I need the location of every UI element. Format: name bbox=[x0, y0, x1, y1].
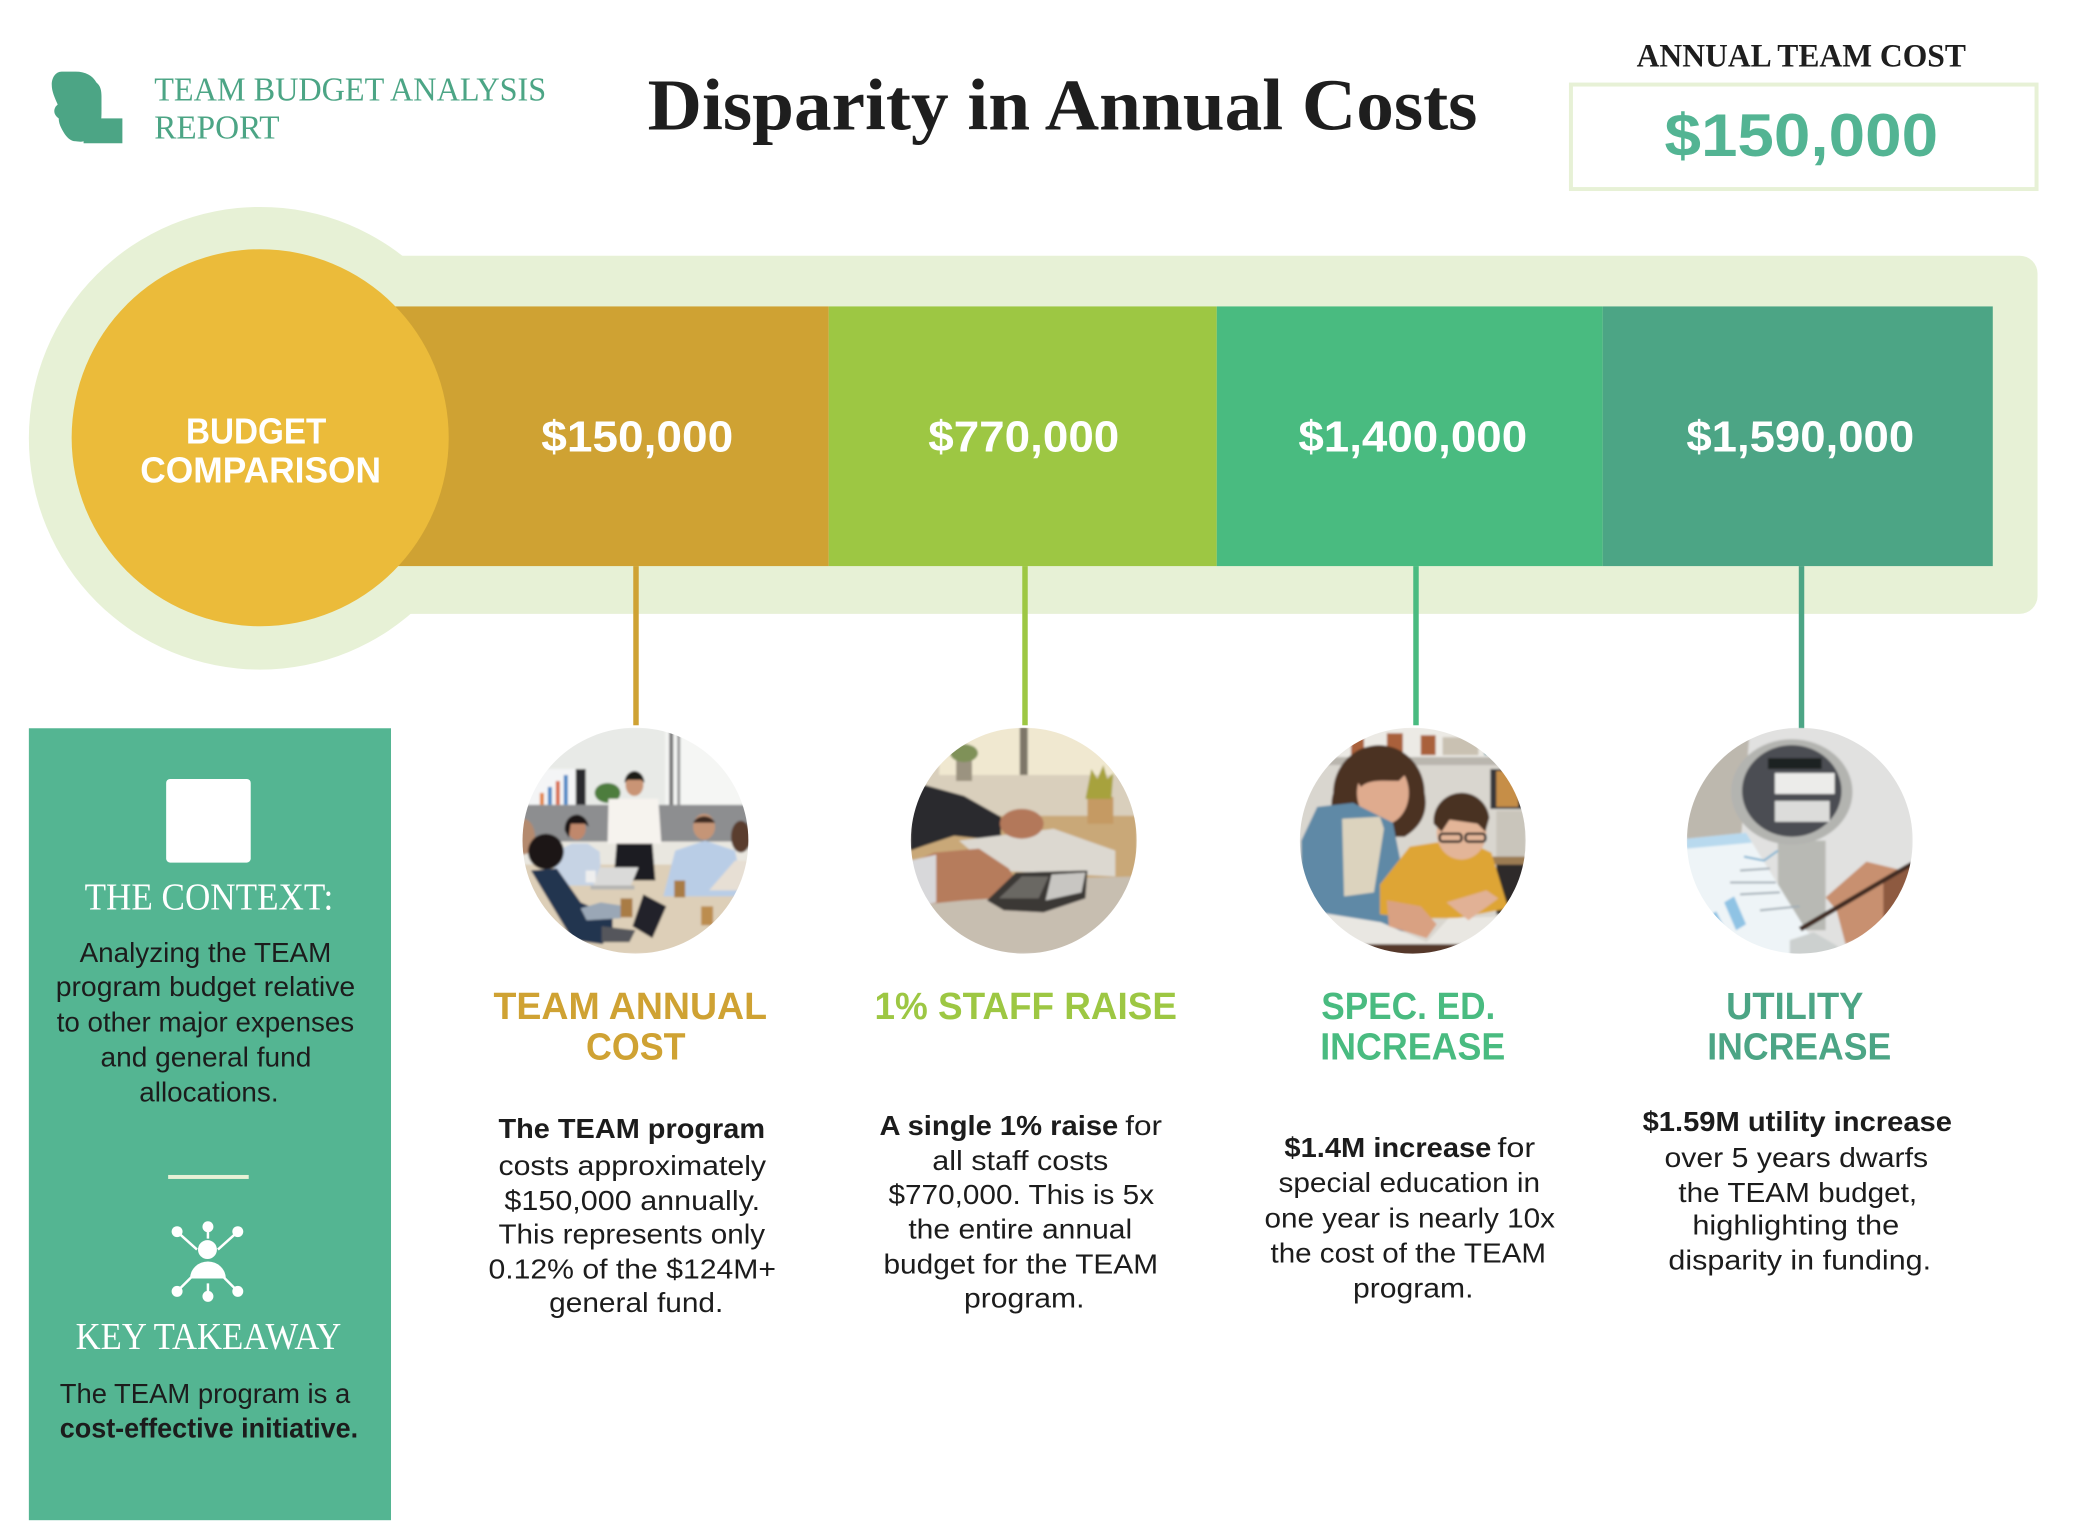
header label: REPORT bbox=[154, 109, 280, 146]
card text bbox=[1643, 1106, 1952, 1275]
card text bbox=[1265, 1132, 1555, 1303]
card text: The TEAM program bbox=[498, 1113, 765, 1144]
photo: parent and child bbox=[1299, 727, 1526, 960]
context text: allocations. bbox=[139, 1076, 279, 1107]
takeaway heading: KEY TAKEAWAY bbox=[76, 1316, 341, 1358]
card heading bbox=[1320, 986, 1505, 1069]
card heading: 1% STAFF RAISE bbox=[875, 986, 1177, 1028]
card text: disparity in funding. bbox=[1668, 1244, 1931, 1275]
card: team annual cost bbox=[489, 986, 776, 1318]
card heading: UTILITY bbox=[1726, 986, 1863, 1028]
budget comparison circle: COMPARISON bbox=[140, 451, 381, 491]
card: utility bbox=[1643, 986, 1952, 1275]
photo: calculator bbox=[910, 727, 1137, 954]
card text: budget for the TEAM bbox=[883, 1248, 1158, 1279]
cost segment: utility bbox=[1603, 306, 1993, 566]
card text: for bbox=[1125, 1110, 1162, 1141]
card text: for bbox=[1497, 1132, 1535, 1163]
context text: and general fund bbox=[100, 1042, 311, 1073]
takeaway text: The TEAM program is a bbox=[60, 1378, 351, 1409]
card text: the TEAM budget, bbox=[1678, 1177, 1917, 1208]
icon: blank square bbox=[166, 779, 251, 863]
cost segment: staff raise: $770,000 bbox=[928, 413, 1119, 462]
context text bbox=[56, 937, 355, 1107]
card text: general fund. bbox=[549, 1287, 723, 1318]
logo icon bbox=[52, 72, 122, 143]
context text: to other major expenses bbox=[57, 1007, 354, 1038]
annual team cost callout bbox=[1571, 39, 2037, 189]
card text: all staff costs bbox=[932, 1145, 1108, 1176]
context heading: THE CONTEXT: bbox=[85, 876, 333, 918]
connector: raise bbox=[1022, 566, 1028, 725]
card text: A single 1% raise bbox=[879, 1110, 1118, 1141]
card text: the entire annual bbox=[908, 1214, 1132, 1245]
cost segment: staff raise bbox=[829, 306, 1217, 566]
card text: $1.59M utility increase bbox=[1643, 1106, 1952, 1137]
card: staff raise bbox=[875, 986, 1177, 1313]
card heading: SPEC. ED. bbox=[1321, 986, 1495, 1028]
card text: This represents only bbox=[498, 1219, 765, 1250]
card text bbox=[489, 1113, 776, 1318]
card text: program. bbox=[964, 1282, 1084, 1313]
card heading bbox=[1707, 986, 1891, 1069]
photo: team meeting bbox=[511, 727, 751, 954]
connector: spec ed bbox=[1413, 566, 1419, 725]
card text: the cost of the TEAM bbox=[1270, 1238, 1546, 1269]
card text: program. bbox=[1353, 1272, 1473, 1303]
card text: $770,000. This is 5x bbox=[888, 1179, 1154, 1210]
takeaway text bbox=[60, 1378, 358, 1444]
card: special education bbox=[1265, 986, 1555, 1303]
card text: $150,000 annually. bbox=[504, 1185, 760, 1216]
card text: highlighting the bbox=[1692, 1210, 1899, 1241]
card heading: INCREASE bbox=[1320, 1027, 1505, 1069]
header label: TEAM BUDGET ANALYSIS bbox=[154, 71, 546, 108]
header label bbox=[154, 71, 546, 146]
icon: network person bbox=[172, 1221, 243, 1302]
card text: costs approximately bbox=[498, 1150, 766, 1181]
card heading: INCREASE bbox=[1707, 1027, 1891, 1069]
left panel bbox=[29, 728, 391, 1520]
annual team cost callout: $150,000 bbox=[1664, 101, 1938, 169]
budget comparison track bbox=[29, 207, 2038, 670]
connector: utility bbox=[1799, 566, 1804, 729]
card text: 0.12% of the $124M+ bbox=[489, 1253, 776, 1284]
cost segment: team annual cost: $150,000 bbox=[541, 413, 733, 462]
context text: Analyzing the TEAM bbox=[80, 937, 331, 968]
card heading: TEAM ANNUAL bbox=[493, 986, 767, 1028]
budget comparison circle bbox=[72, 249, 449, 626]
card heading bbox=[493, 986, 767, 1069]
title: Disparity in Annual Costs bbox=[648, 64, 1477, 145]
takeaway text: cost-effective initiative. bbox=[60, 1413, 358, 1444]
cost segment: special education bbox=[1217, 306, 1603, 566]
card text bbox=[879, 1110, 1162, 1313]
annual team cost callout: ANNUAL TEAM COST bbox=[1637, 39, 1966, 75]
card text: over 5 years dwarfs bbox=[1664, 1142, 1928, 1173]
card heading: COST bbox=[586, 1027, 685, 1069]
context text: program budget relative bbox=[56, 971, 355, 1002]
card text: special education in bbox=[1278, 1167, 1540, 1198]
connector: team bbox=[633, 566, 639, 725]
photo: utility meter bbox=[1686, 727, 1913, 956]
cost segment: team annual cost bbox=[378, 306, 829, 566]
budget comparison circle: BUDGET bbox=[186, 412, 326, 452]
cost segment: utility: $1,590,000 bbox=[1686, 413, 1914, 462]
card text: $1.4M increase bbox=[1284, 1132, 1491, 1163]
card text: one year is nearly 10x bbox=[1265, 1203, 1555, 1234]
cost segment: special education: $1,400,000 bbox=[1298, 413, 1527, 462]
